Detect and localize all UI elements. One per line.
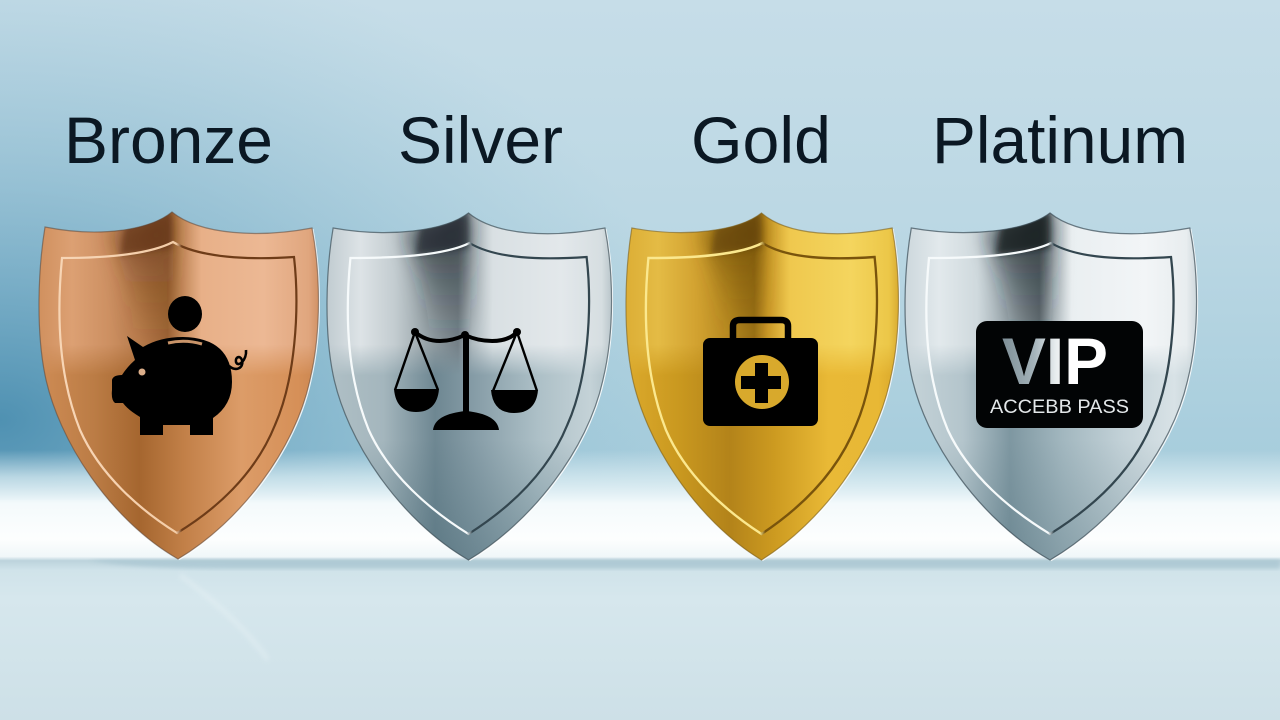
icon: piggy bank with coin: [112, 296, 246, 435]
shield: platinum: [896, 205, 1209, 565]
label: Gold: Gold: [691, 103, 831, 177]
label: Silver: Silver: [398, 103, 563, 177]
shield: gold: [617, 205, 910, 565]
icon: balance scales: [394, 328, 538, 430]
label: Platinum: Platinum: [932, 103, 1188, 177]
label: Bronze: Bronze: [64, 103, 273, 177]
shield: bronze: [30, 205, 330, 565]
icon: medical kit: [703, 320, 818, 426]
icon: VIP access pass card: [976, 321, 1143, 428]
icon: VIP access pass card: VIP: [1002, 324, 1108, 398]
shield: silver: [318, 205, 623, 565]
icon: VIP access pass card: ACCEBB PASS: [990, 396, 1129, 418]
